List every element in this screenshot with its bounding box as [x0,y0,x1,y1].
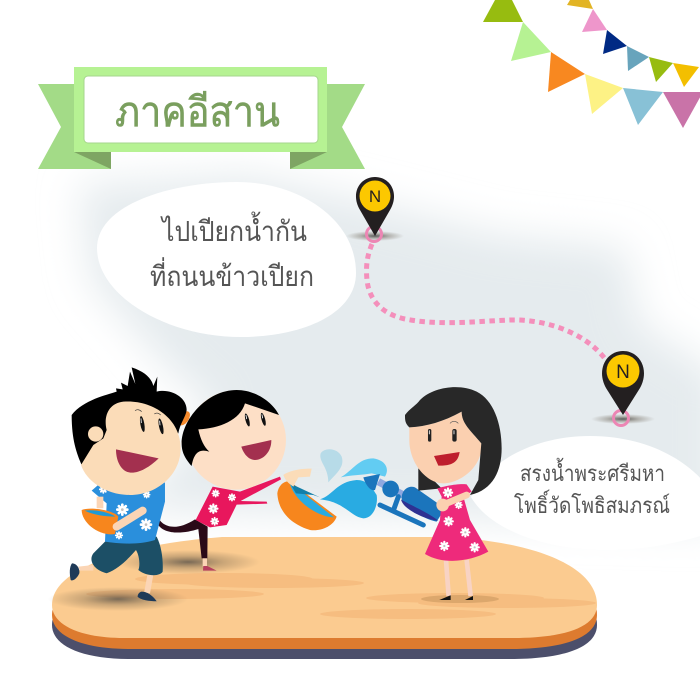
mouth [116,449,159,473]
bubble text: สรงน้ำพระศรีมหา [520,458,665,486]
face [409,412,481,483]
title ribbon [38,67,365,169]
character: girl with water gun [405,387,502,600]
map pin 1: N [369,187,381,206]
map pin 2 [591,351,655,426]
back hair [418,468,442,491]
water gun [363,474,445,525]
speech bubble: right [471,436,700,550]
hair [72,367,187,465]
background haze [80,175,700,525]
bubble text: ไปเปียกน้ำกัน [160,211,307,247]
mouth [434,452,460,466]
bubble text [514,458,670,518]
shorts [91,537,163,575]
legs [157,515,208,558]
arm [443,495,467,505]
title text: ภาคอีสาน [115,89,280,135]
bubble text [150,211,314,292]
bowl [82,509,118,534]
hand [283,469,312,487]
light water [341,458,387,477]
splash, big bowl and water gun [277,449,445,530]
pale water drop [320,449,342,482]
bubble text: โพธิ์วัดโพธิสมภรณ์ [514,490,670,518]
hair [405,387,502,495]
eyes [244,413,251,427]
shirt [92,483,165,544]
eyes [139,416,146,432]
map pin 1 [346,177,404,242]
head [186,390,286,490]
map pin 2: N [616,362,630,383]
dress [425,484,488,561]
ground island [48,537,597,659]
bubble text: ที่ถนนข้าวเปียก [150,257,314,292]
route dotted line [367,244,606,360]
bowl [277,481,337,530]
bunting flags [483,0,700,128]
legs and shoes [78,565,93,571]
hair tie [176,409,192,428]
water [320,480,377,518]
head [81,401,181,495]
shirt and arms [196,477,281,527]
speech bubble: left [97,182,356,337]
character: boy with bowl [70,367,187,601]
eyes [428,429,431,442]
character: girl with bowl [157,390,286,571]
legs [446,560,471,596]
arm [117,511,143,527]
mouth [241,440,271,460]
